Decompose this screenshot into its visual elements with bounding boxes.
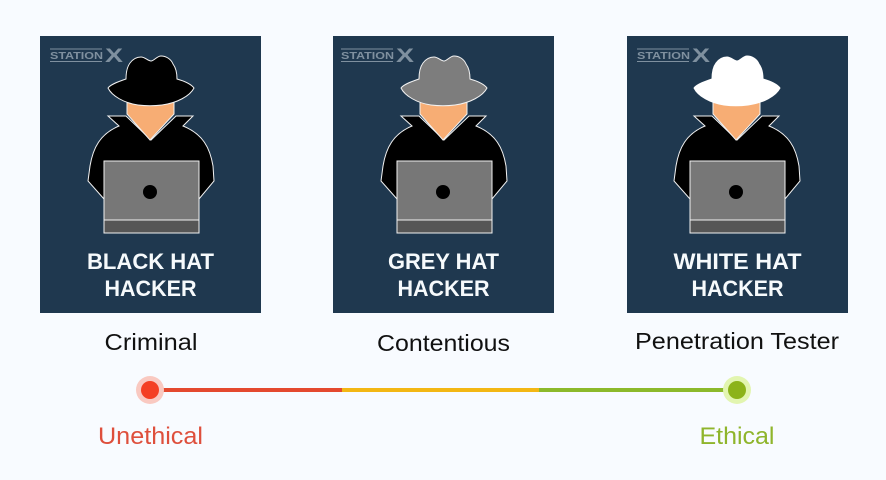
panel: grey hat hacker bbox=[333, 36, 554, 313]
logo: StationX: X bbox=[692, 46, 710, 67]
heading: black hat hacker: BLACK HAT bbox=[87, 249, 215, 274]
label: ethical: Ethical bbox=[700, 423, 774, 450]
label: criminal: Criminal bbox=[104, 329, 198, 355]
label: unethical: Unethical bbox=[98, 423, 203, 450]
heading: white hat hacker bbox=[674, 249, 802, 301]
heading: white hat hacker: HACKER bbox=[692, 276, 784, 301]
logo: StationX bbox=[50, 46, 123, 67]
label: penetration tester: Penetration Tester bbox=[635, 328, 839, 354]
marker: ethical bbox=[723, 376, 751, 404]
logo: StationX: X bbox=[396, 46, 414, 67]
label: contentious: Contentious bbox=[377, 330, 510, 356]
logo: StationX bbox=[637, 46, 710, 67]
logo: StationX bbox=[341, 46, 414, 67]
logo: StationX: X bbox=[105, 46, 123, 67]
heading: black hat hacker bbox=[87, 249, 215, 301]
panel: white hat hacker bbox=[627, 36, 848, 313]
figure: hacker in white hat bbox=[674, 56, 800, 233]
panel: black hat hacker bbox=[40, 36, 261, 313]
logo: StationX: STATION bbox=[50, 51, 103, 62]
heading: grey hat hacker: GREY HAT bbox=[388, 249, 500, 274]
figure: hacker in grey hat bbox=[381, 56, 507, 233]
chart: ethics spectrum line bbox=[136, 376, 751, 404]
heading: grey hat hacker bbox=[388, 249, 500, 301]
logo: StationX: STATION bbox=[637, 51, 690, 62]
figure: hacker in black hat bbox=[88, 56, 214, 233]
heading: white hat hacker: WHITE HAT bbox=[674, 249, 802, 274]
heading: black hat hacker: HACKER bbox=[104, 276, 197, 301]
logo: StationX: STATION bbox=[341, 51, 394, 62]
marker: unethical bbox=[136, 376, 164, 404]
heading: grey hat hacker: HACKER bbox=[398, 276, 490, 301]
